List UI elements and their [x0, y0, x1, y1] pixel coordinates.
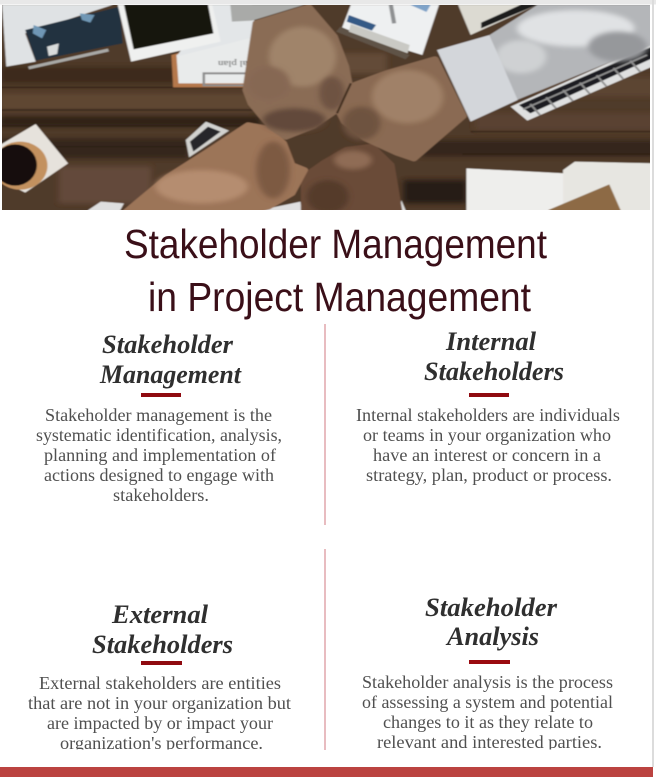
divider: top row: [324, 324, 326, 525]
panel: internal stakeholders: [356, 327, 620, 485]
accent bar: [469, 660, 510, 664]
heading: stakeholder analysis: [425, 593, 558, 651]
divider: bottom row: [324, 549, 326, 750]
text block: internal stakeholders definition: [356, 405, 620, 485]
text block: external stakeholders definition: that are not in your organization but: [28, 693, 291, 713]
text block: stakeholder analysis definition: Stakeholder analysis is the process: [362, 672, 613, 692]
top fist and arm: [246, 7, 350, 137]
heading: external stakeholders: [92, 600, 233, 659]
text block: internal stakeholders definition: have an interest or concern in a: [373, 445, 601, 465]
text block: internal stakeholders definition: or teams in your organization who: [363, 425, 611, 445]
heading: stakeholder management: Management: [99, 360, 242, 389]
text block: stakeholder management definition: planning and implementation of: [44, 445, 276, 465]
heading: internal stakeholders: Internal: [445, 327, 537, 356]
heading: stakeholder analysis: Stakeholder: [425, 593, 558, 622]
title: in Project Management: [148, 274, 532, 320]
decorative object: [186, 122, 229, 157]
text block: external stakeholders definition: are impacted by or impact your: [47, 713, 273, 733]
heading: stakeholder analysis: Analysis: [445, 622, 539, 651]
text block: external stakeholders definition: organization's performance.: [60, 733, 263, 753]
bottom fist: [305, 147, 399, 215]
right fist and arm: [340, 59, 463, 158]
panel: external stakeholders: [28, 600, 291, 753]
accent bar: [141, 661, 182, 665]
heading: stakeholder management: [99, 330, 242, 389]
top sleeve: [230, 5, 305, 22]
text block: internal stakeholders definition: strategy, plan, product or process.: [366, 465, 612, 485]
heading: external stakeholders: External: [111, 600, 209, 629]
hero photo: four fists bumping on a wooden desk: al plan: [218, 58, 247, 68]
text block: stakeholder management definition: systematic identification, analysis,: [36, 425, 282, 445]
title: Stakeholder Management: [124, 221, 548, 267]
title: [124, 221, 548, 320]
text block: external stakeholders definition: External stakeholders are entities: [39, 673, 281, 693]
panel: stakeholder management: [36, 330, 282, 505]
text block: stakeholder management definition: [36, 405, 282, 505]
tablet: [118, 5, 221, 62]
heading: stakeholder management: Stakeholder: [102, 330, 234, 359]
invoice: [341, 5, 439, 55]
text block: stakeholder analysis definition: relevant and interested parties.: [377, 732, 602, 752]
text block: stakeholder analysis definition: changes to it as they relate to: [383, 712, 593, 732]
text block: internal stakeholders definition: Internal stakeholders are individuals: [356, 405, 620, 425]
shirt cuff: [437, 35, 518, 122]
clipboard: [170, 52, 244, 88]
accent bar: [141, 393, 181, 397]
footer band: [0, 767, 653, 777]
text block: stakeholder management definition: Stakeholder management is the: [45, 405, 272, 425]
laptop and keyboard: [458, 5, 538, 35]
panel: stakeholder analysis: [362, 593, 613, 752]
magazine: [2, 5, 113, 67]
text block: external stakeholders definition: [28, 673, 291, 753]
bottom-right papers: [466, 168, 565, 215]
coaster and coffee cup: [0, 124, 68, 193]
text block: stakeholder analysis definition: of assessing a system and potential: [362, 692, 613, 712]
hero photo: four fists bumping on a wooden desk: [0, 0, 656, 215]
heading: external stakeholders: Stakeholders: [92, 630, 233, 659]
bottom-left white paper scraps: [87, 200, 125, 210]
text block: stakeholder management definition: stakeholders.: [113, 485, 209, 505]
heading: internal stakeholders: [424, 327, 564, 386]
text block: stakeholder management definition: actions designed to engage with: [44, 465, 274, 485]
accent bar: [469, 393, 509, 397]
left fist and arm: [124, 125, 305, 215]
heading: internal stakeholders: Stakeholders: [424, 357, 564, 386]
shirt sleeve: [490, 5, 656, 100]
text block: stakeholder analysis definition: [362, 672, 613, 752]
